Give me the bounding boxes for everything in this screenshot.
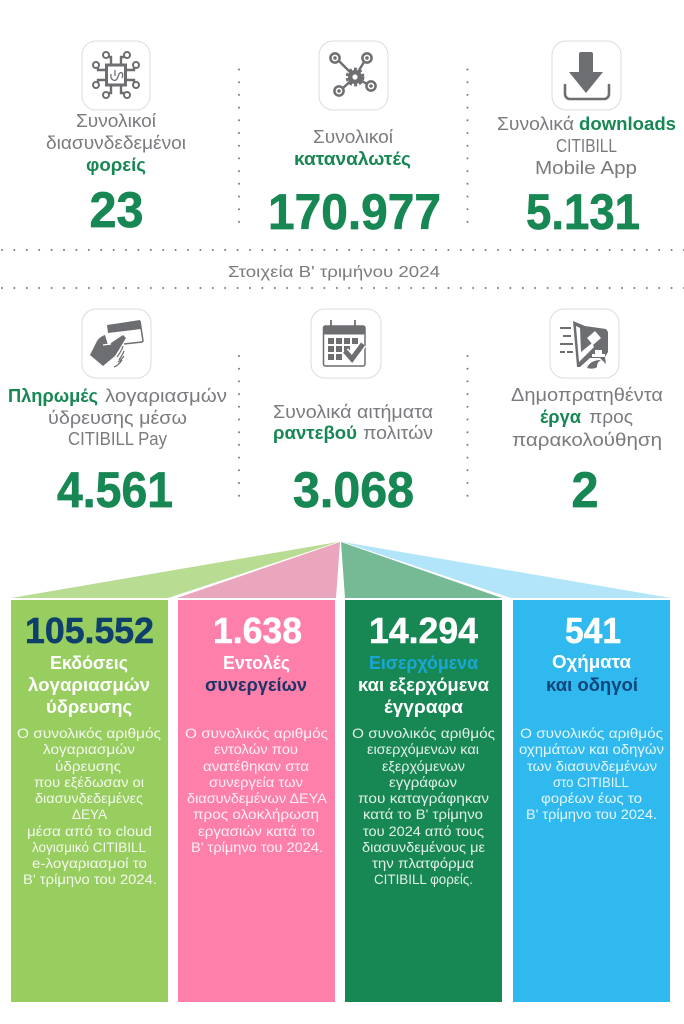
panel: repair orders: 1.638: [213, 610, 302, 651]
number: 170.977: 170.977: [268, 184, 441, 240]
panel: water bill issues: e-λογαριασμοί το: [32, 855, 147, 871]
icon: connected chip: [82, 41, 150, 110]
heading: downloads: CITIBILL: [556, 136, 617, 156]
heading: auctioned projects: παρακολούθηση: [512, 430, 662, 450]
panel: repair orders: Β' τρίμηνο του 2024.: [191, 839, 323, 855]
heading: auctioned projects: [511, 385, 663, 450]
panel: vehicles and drivers: [513, 600, 670, 1002]
panel: repair orders: διασυνδεμένων ΔΕΥΑ: [187, 790, 328, 806]
panel: repair orders: προς ολοκλήρωση: [193, 806, 319, 822]
heading: downloads: Συνολικά: [497, 114, 574, 134]
heading: downloads: Mobile App: [535, 158, 637, 178]
heading: auctioned projects: έργα: [540, 407, 581, 427]
panel: water bill issues: ύδρευσης: [46, 697, 132, 717]
panel: repair orders: εργασιών κατά το: [198, 823, 315, 839]
panel: repair orders: συνεργείων: [205, 675, 307, 695]
panel: incoming and outgoing documents: και εξερχόμενα: [358, 675, 489, 696]
panel: repair orders: Ο συνολικός αριθμός: [185, 725, 328, 741]
heading: auctioned projects: προς: [589, 407, 633, 427]
number: 23: 23: [90, 182, 144, 238]
heading: appointments: [273, 402, 433, 443]
icon: consumers network: [319, 41, 388, 110]
period label: Στοιχεία Β' τριμήνου 2024: [228, 264, 440, 281]
panel: repair orders: [178, 600, 335, 1002]
panel: water bill issues: Β' τρίμηνο του 2024.: [23, 871, 157, 887]
panel: incoming and outgoing documents: εξερχόμενων: [382, 758, 465, 774]
number: 2: 2: [572, 462, 598, 518]
panel: incoming and outgoing documents: εγγράφων: [389, 774, 457, 790]
icon: card payment: [82, 309, 151, 378]
funnel: light pink wedge: [177, 542, 340, 598]
panel: incoming and outgoing documents: Εισερχόμενα: [369, 653, 478, 673]
funnel: light blue wedge: [343, 542, 671, 598]
panel: vehicles and drivers: οχημάτων και οδηγών: [519, 741, 664, 757]
panel: water bill issues: λογαριασμών: [28, 675, 150, 695]
heading: appointments: ραντεβού: [273, 423, 357, 443]
panel: water bill issues: [11, 600, 168, 1002]
heading: connected entities: [46, 111, 186, 175]
panel: vehicles and drivers: Β' τρίμηνο του 2024.: [526, 806, 657, 822]
panel: water bill issues: διασυνδεδεμένες: [35, 790, 143, 806]
heading: payments: [8, 386, 227, 449]
heading: downloads: downloads: [579, 114, 676, 134]
panel: incoming and outgoing documents: εισερχόμενων και: [367, 741, 479, 757]
panel: incoming and outgoing documents: διασυνδεμένους με: [362, 839, 485, 855]
icon: calendar: [311, 309, 381, 378]
panel: vehicles and drivers: στο CITIBILL: [553, 774, 629, 790]
panel: vehicles and drivers: φορέων έως το: [541, 790, 642, 806]
panel: water bill issues: λογισμικό CITIBILL: [32, 839, 146, 855]
panel: water bill issues: 105.552: [25, 610, 154, 651]
heading: appointments: Συνολικά αιτήματα: [273, 402, 433, 422]
panel: incoming and outgoing documents: κατά το Β' τρίμηνο: [363, 806, 483, 822]
panel: repair orders: εντολών που: [214, 741, 298, 757]
heading: payments: λογαριασμών: [105, 386, 227, 406]
panel: water bill issues: Ο συνολικός αριθμός: [17, 725, 161, 741]
panel: water bill issues: Εκδόσεις: [50, 653, 128, 673]
heading: consumers: καταναλωτές: [294, 149, 411, 169]
heading: payments: ύδρευσης μέσω: [48, 408, 187, 428]
panel: water bill issues: που εξέδωσαν οι: [34, 774, 144, 790]
panel: vehicles and drivers: 541: [565, 610, 621, 651]
number: 3.068: 3.068: [293, 462, 414, 518]
panel: incoming and outgoing documents: 14.294: [369, 610, 478, 651]
number: 5.131: 5.131: [526, 184, 640, 240]
heading: payments: CITIBILL Pay: [68, 429, 167, 449]
icon: download: [552, 41, 621, 110]
panel: incoming and outgoing documents: [345, 600, 502, 1002]
icon: auction: [550, 309, 619, 378]
panel: vehicles and drivers: των διασυνδεμένων: [527, 758, 657, 774]
heading: connected entities: Συνολικοί: [76, 111, 156, 131]
panel: incoming and outgoing documents: CITIBILL φορείς.: [374, 871, 473, 887]
heading: consumers: [294, 127, 411, 169]
panel: incoming and outgoing documents: που καταγράφηκαν: [358, 790, 489, 806]
heading: auctioned projects: Δημοπρατηθέντα: [511, 385, 663, 405]
panel: vehicles and drivers: Οχήματα: [552, 652, 631, 672]
panel: water bill issues: ύδρευσης: [55, 758, 121, 774]
funnel: muted green wedge: [341, 542, 502, 598]
heading: connected entities: διασυνδεδεμένοι: [46, 133, 186, 153]
panel: incoming and outgoing documents: έγγραφα: [384, 697, 463, 717]
panel: water bill issues: ΔΕΥΑ: [72, 806, 108, 822]
panel: vehicles and drivers: και οδηγοί: [546, 675, 638, 695]
heading: connected entities: φορείς: [86, 155, 146, 175]
panel: water bill issues: μέσα από το cloud: [27, 823, 152, 839]
panel: water bill issues: λογαριασμών: [43, 741, 135, 757]
panel: incoming and outgoing documents: του 2024 από τους: [363, 823, 484, 839]
panel: vehicles and drivers: Ο συνολικός αριθμός: [520, 725, 663, 741]
panel: repair orders: Εντολές: [223, 653, 290, 673]
heading: downloads: [497, 114, 676, 178]
heading: appointments: πολιτών: [363, 423, 433, 443]
panel: incoming and outgoing documents: την πλατφόρμα: [372, 855, 474, 871]
panel: incoming and outgoing documents: Ο συνολικός αριθμός: [352, 725, 495, 741]
heading: consumers: Συνολικοί: [313, 127, 393, 147]
funnel: light green wedge: [11, 542, 338, 598]
panel: repair orders: συνεργεία των: [209, 774, 303, 790]
panel: repair orders: ανατέθηκαν στα: [203, 758, 309, 774]
number: 4.561: 4.561: [57, 462, 173, 518]
heading: payments: Πληρωμές: [8, 386, 98, 406]
